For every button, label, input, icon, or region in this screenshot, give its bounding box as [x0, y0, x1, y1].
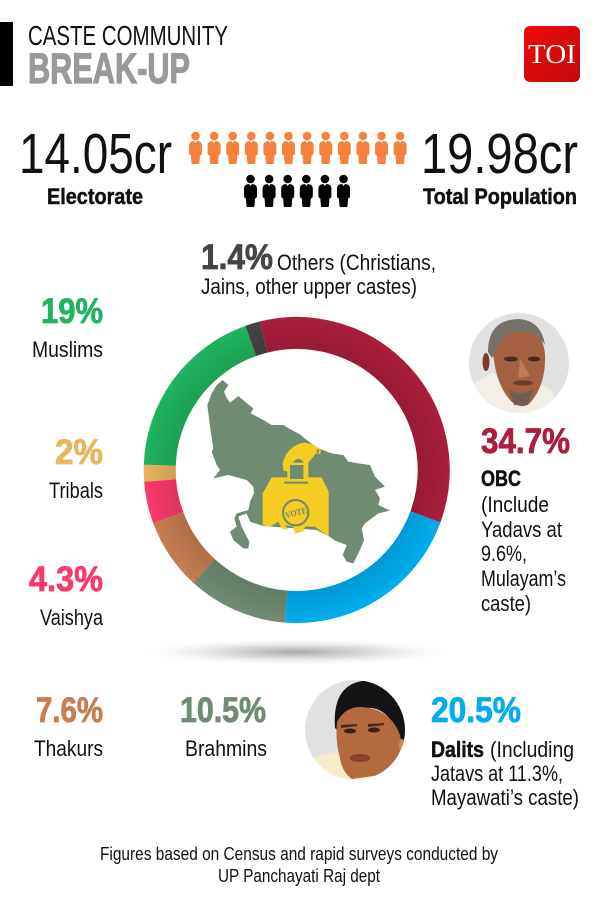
- stat: electorate: 14.05cr: [19, 122, 172, 186]
- callout: Tribals: 2%: [55, 433, 103, 472]
- stat: total population: Total Population: [423, 184, 577, 209]
- callout: Dalits: Jatavs at 11.3%,: [431, 761, 563, 786]
- callout: OBC: Mulayam’s: [481, 566, 566, 591]
- footnote: Figures based on Census and rapid surveys conducted by: [100, 844, 498, 864]
- icon: ballot box: VOTE: [284, 505, 308, 520]
- title block: [0, 20, 228, 93]
- callout: Tribals: [49, 433, 103, 503]
- callout: Brahmins: [180, 691, 267, 761]
- photo: Mayawati: [305, 680, 406, 782]
- logo: TOI: [524, 26, 580, 82]
- callout: Muslims: 19%: [41, 292, 103, 331]
- pictogram: people: [189, 132, 407, 207]
- callout: OBC: Yadavs at: [481, 517, 562, 542]
- logo: TOI: TOI: [528, 39, 576, 69]
- callout: Dalits: 20.5%: [431, 691, 521, 730]
- callout: Brahmins: Brahmins: [185, 736, 267, 761]
- callout: OBC: 34.7%: [481, 422, 570, 461]
- map: Uttar Pradesh with ballot box: [207, 380, 390, 563]
- callout: Thakurs: 7.6%: [36, 691, 103, 730]
- callout: Muslims: Muslims: [32, 337, 103, 362]
- callout: Thakurs: Thakurs: [34, 736, 103, 761]
- callout: Others: 1.4%: [201, 238, 273, 277]
- callout: OBC: OBC: [481, 466, 521, 491]
- callout: Tribals: Tribals: [49, 478, 103, 503]
- callout: Others: Jains, other upper castes): [201, 274, 417, 299]
- callout: OBC: 9.6%,: [481, 541, 527, 566]
- callout: Dalits: Dalits: [431, 737, 484, 762]
- title block: BREAK-UP: [28, 45, 190, 93]
- callout: OBC: (Include: [481, 492, 549, 517]
- callout: Brahmins: 10.5%: [180, 691, 266, 730]
- ring shadow: [142, 639, 452, 665]
- callout: Dalits: [431, 691, 579, 810]
- callout: Vaishya: 4.3%: [29, 560, 103, 599]
- footnote: UP Panchayati Raj dept: [218, 866, 380, 886]
- donut chart: [160, 333, 434, 607]
- icon: ballot box: [263, 443, 329, 537]
- title block: CASTE COMMUNITY: [28, 20, 228, 51]
- callout: Others: Others (Christians,: [277, 250, 436, 275]
- callout: OBC: caste): [481, 591, 531, 616]
- stat: electorate: [19, 122, 172, 209]
- callout: Thakurs: [34, 691, 103, 761]
- stat: total population: [421, 122, 578, 209]
- callout: Dalits: (Including: [490, 737, 574, 762]
- callout: Others: [201, 238, 436, 299]
- callout: Muslims: [32, 292, 103, 362]
- stat: electorate: Electorate: [47, 184, 143, 209]
- callout: Vaishya: Vaishya: [40, 605, 104, 630]
- callout: Vaishya: [29, 560, 104, 630]
- photo: Mulayam: [469, 313, 569, 413]
- footnote: [100, 844, 498, 886]
- callout: OBC: [481, 422, 570, 616]
